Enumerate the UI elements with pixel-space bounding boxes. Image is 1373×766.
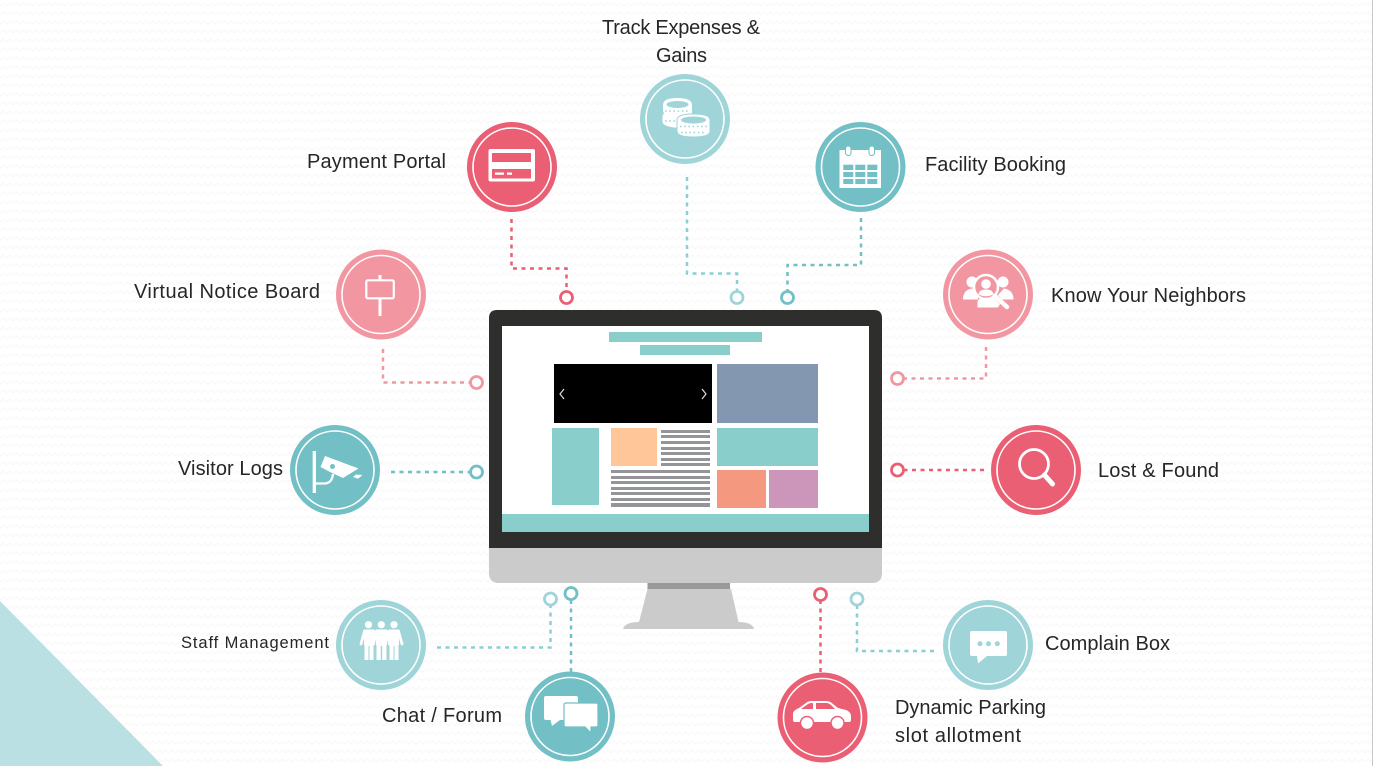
teal block	[717, 428, 818, 466]
feature: Complain Box	[851, 593, 1170, 690]
label: Lost & Found	[1098, 460, 1219, 482]
text lines bottom	[611, 470, 710, 507]
screen	[502, 326, 869, 532]
connector	[383, 349, 470, 382]
connector	[788, 218, 861, 291]
icon: credit card	[467, 122, 557, 212]
icon: coins	[640, 74, 730, 164]
icon: calendar	[816, 122, 906, 212]
feature: Visitor Logs	[178, 425, 482, 515]
connector	[904, 347, 986, 378]
feature: Staff Management	[181, 593, 556, 690]
icon: security camera	[290, 425, 380, 515]
label: Chat / Forum	[382, 705, 502, 727]
icon: chat bubbles	[525, 672, 615, 762]
anchor dot	[470, 466, 482, 478]
label	[602, 17, 761, 67]
footer bar	[502, 514, 869, 532]
feature: Track Expenses & Gains	[602, 17, 761, 304]
connector	[904, 469, 984, 471]
orange block	[717, 470, 766, 508]
peach block	[611, 428, 657, 466]
icon: staff group	[336, 600, 426, 690]
label: Payment Portal	[307, 151, 446, 173]
connector	[819, 601, 822, 672]
blue block	[717, 364, 818, 423]
label: Dynamic Parking	[895, 697, 1046, 719]
feature: Chat / Forum	[382, 588, 615, 762]
label	[895, 697, 1046, 747]
anchor dot	[560, 292, 572, 304]
icon: magnifier	[991, 425, 1081, 515]
label: Facility Booking	[925, 154, 1066, 176]
label: Visitor Logs	[178, 458, 283, 480]
purple block	[769, 470, 818, 508]
feature: Facility Booking	[782, 122, 1066, 304]
label: Gains	[656, 45, 707, 67]
connector	[570, 600, 572, 672]
feature: Payment Portal	[307, 122, 572, 304]
anchor dot	[851, 593, 863, 605]
connector	[857, 605, 934, 651]
anchor dot	[892, 372, 904, 384]
corner triangle	[0, 601, 163, 766]
label: Complain Box	[1045, 633, 1170, 655]
label: Know Your Neighbors	[1051, 285, 1246, 307]
feature: Lost & Found	[892, 425, 1219, 515]
anchor dot	[814, 588, 826, 600]
anchor dot	[782, 292, 794, 304]
anchor dot	[731, 292, 743, 304]
feature: Virtual Notice Board	[134, 250, 482, 388]
connector	[687, 177, 737, 291]
text lines top	[661, 430, 710, 466]
icon: people search	[943, 250, 1033, 340]
anchor dot	[892, 464, 904, 476]
label: Virtual Notice Board	[134, 281, 320, 303]
anchor dot	[565, 588, 577, 600]
feature: Know Your Neighbors	[892, 250, 1246, 384]
feature: Dynamic Parking slot allotment	[778, 588, 1046, 762]
monitor bezel	[489, 310, 882, 548]
image slider	[554, 364, 712, 423]
left sidebar	[552, 428, 599, 505]
label: Track Expenses &	[602, 17, 761, 39]
label: slot allotment	[895, 725, 1021, 747]
anchor dot	[470, 376, 482, 388]
icon: signboard	[336, 250, 426, 340]
monitor chin	[489, 545, 882, 583]
connector	[512, 219, 566, 291]
monitor stand	[623, 583, 754, 629]
connector	[437, 605, 550, 648]
label: Staff Management	[181, 634, 329, 652]
anchor dot	[544, 593, 556, 605]
connector	[391, 471, 470, 473]
icon: car	[778, 672, 868, 762]
monitor	[489, 310, 882, 629]
header bars	[609, 332, 762, 355]
icon: speech bubble	[943, 600, 1033, 690]
